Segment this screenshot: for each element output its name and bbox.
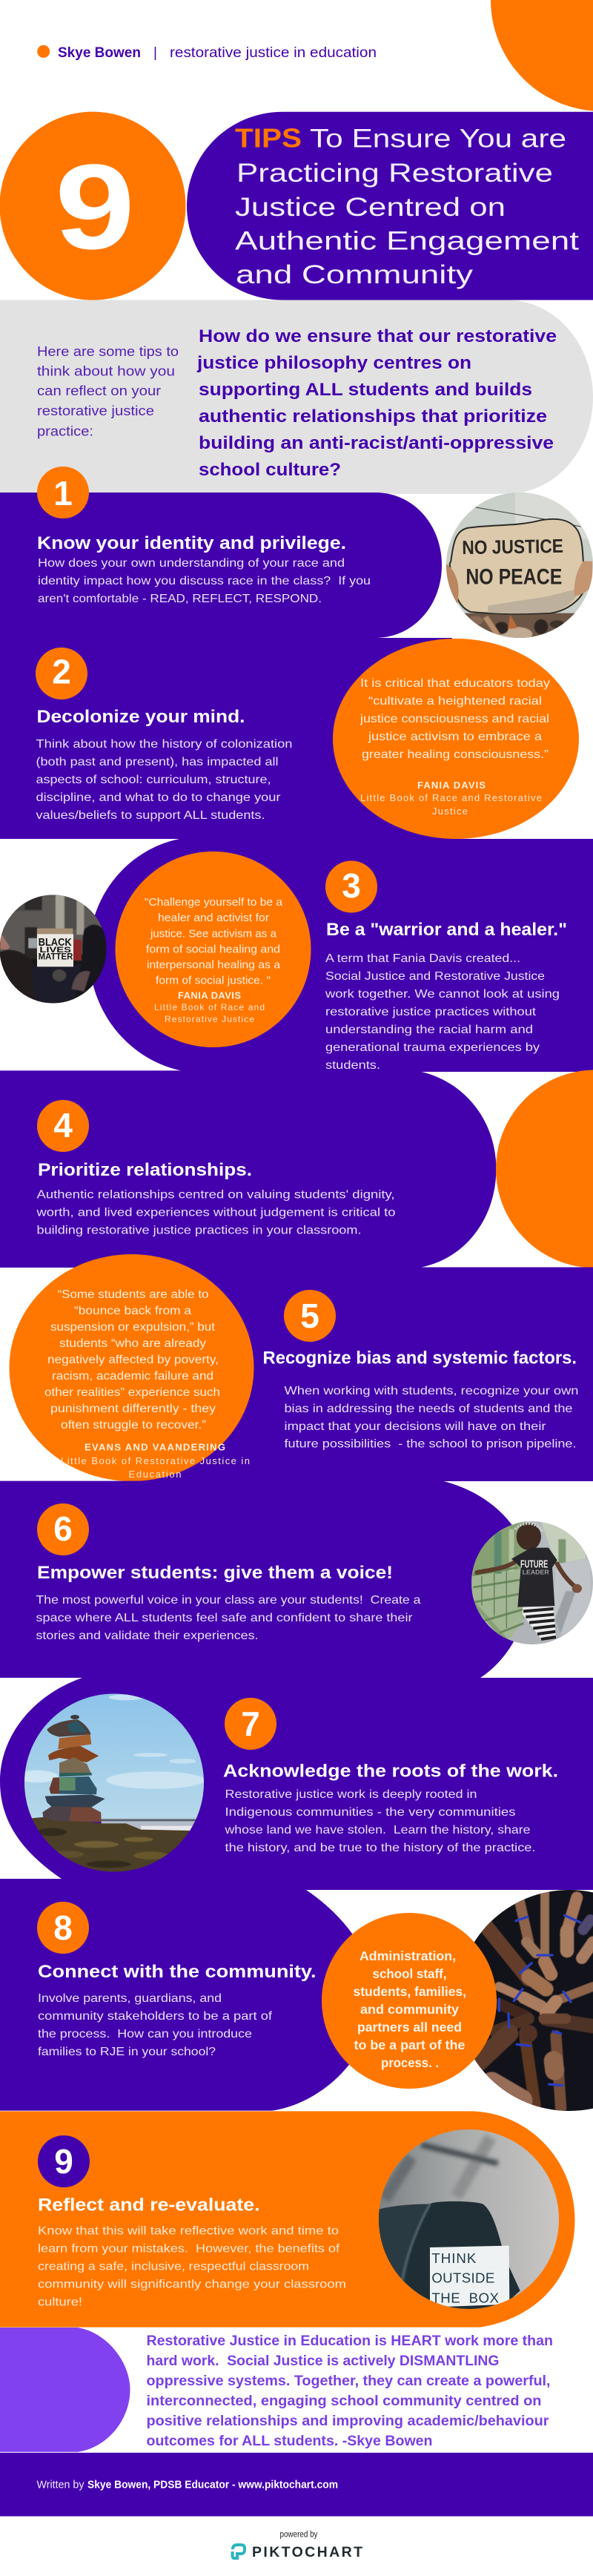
- photo: black lives matter protest: BLACK: [39, 937, 72, 949]
- footer bar: [0, 2453, 593, 2516]
- intro text: [37, 344, 179, 439]
- body 8: community stakeholders to be a part of: [38, 2010, 273, 2023]
- photo: joined hands with wristbands: [474, 1890, 593, 2111]
- body 6: stories and validate their experiences.: [36, 1630, 258, 1642]
- body 8: the process. How can you introduce: [38, 2028, 252, 2040]
- footer bar: Skye Bowen, PDSB Educator - www.piktochart.com: [87, 2479, 338, 2491]
- key question: justice philosophy centres on: [196, 353, 471, 373]
- body 2: (both past and present), has impacted all: [36, 756, 279, 768]
- body 7: [224, 1788, 535, 1854]
- body 5: [285, 1385, 578, 1451]
- body 8: [38, 1992, 273, 2058]
- panel: tip 8: [0, 1879, 593, 2114]
- body 3: Social Justice and Restorative Justice: [325, 970, 545, 983]
- title banner: Justice Centred on: [235, 193, 506, 222]
- callout bubble: community partners: to be a part of the: [354, 2038, 466, 2052]
- photo: no justice no peace sign: NO JUSTICE: [462, 535, 563, 559]
- body 9: culture!: [38, 2296, 82, 2308]
- quote bubble: Evans and Vaandering: Education: [129, 1469, 181, 1480]
- callout bubble: community partners: school staff,: [372, 1966, 446, 1981]
- closing statement: oppressive systems. Together, they can create a powerful,: [147, 2374, 550, 2389]
- number badge 9: 9: [54, 2142, 73, 2181]
- panel: tip 9: [0, 2111, 575, 2328]
- body 9: community will significantly change your classroom: [38, 2279, 346, 2290]
- quote bubble: Fania Davis: FANIA DAVIS: [417, 780, 486, 791]
- title banner: To Ensure You are: [310, 125, 566, 154]
- callout bubble: community partners: process. .: [381, 2055, 439, 2070]
- number badge 9: [38, 2135, 90, 2187]
- body 4: [36, 1188, 396, 1237]
- photo: stacked rock cairn: [24, 1694, 204, 1872]
- heading 4: Prioritize relationships.: [38, 1160, 252, 1180]
- quote bubble: Evans and Vaandering: punishment differently - they: [50, 1403, 216, 1415]
- body 5: When working with students, recognize your own: [285, 1385, 578, 1397]
- body 3: restorative justice practices without: [325, 1006, 537, 1018]
- body 3: A term that Fania Davis created...: [325, 952, 520, 965]
- quote bubble: Evans and Vaandering: students “who are already: [59, 1337, 206, 1350]
- quote bubble: Fania Davis: greater healing consciousness.”: [362, 748, 549, 761]
- photo: think outside the box lightbox: [379, 2129, 559, 2309]
- number badge 4: 4: [53, 1106, 73, 1144]
- header: author and topic: Skye Bowen: [58, 45, 141, 61]
- panel: tip 2: [0, 638, 579, 839]
- body 1: [38, 557, 371, 605]
- number badge 8: 8: [53, 1908, 73, 1947]
- title banner: Practicing Restorative: [236, 159, 553, 188]
- decorative orange circle right: [496, 1070, 593, 1268]
- decorative orange circle top right: [491, 0, 593, 111]
- quote bubble: challenge yourself: "Challenge yourself to be a: [145, 897, 283, 909]
- number badge 7: [225, 1698, 276, 1750]
- body 8: families to RJE in your school?: [38, 2046, 216, 2058]
- quote bubble: challenge yourself: [116, 851, 311, 1047]
- number badge 2: [36, 648, 87, 699]
- panel: tip 1: [0, 467, 593, 643]
- number badge 5: 5: [300, 1297, 319, 1335]
- quote bubble: Evans and Vaandering: other realities” experience such: [44, 1386, 220, 1399]
- quote bubble: Evans and Vaandering: suspension or expulsion,” but: [50, 1321, 216, 1334]
- body 3: understanding the racial harm and: [325, 1024, 533, 1036]
- quote bubble: Fania Davis: justice consciousness and racial: [360, 713, 549, 725]
- quote bubble: challenge yourself: healer and activist for: [158, 912, 269, 924]
- heading 6: Empower students: give them a voice!: [37, 1563, 393, 1583]
- heading 9: Reflect and re-evaluate.: [38, 2195, 259, 2215]
- number badge 6: 6: [53, 1509, 73, 1548]
- title banner: [187, 112, 593, 300]
- photo: black lives matter protest: LIVES: [39, 946, 71, 955]
- quote bubble: challenge yourself: interpersonal healing as a: [147, 960, 281, 972]
- closing statement: interconnected, engaging school community centred on: [147, 2394, 541, 2409]
- body 4: worth, and lived experiences without judgement is critical to: [36, 1206, 396, 1219]
- key question: How do we ensure that our restorative: [199, 326, 557, 346]
- body 2: values/beliefs to support ALL students.: [36, 809, 265, 822]
- photo: black lives matter protest: [0, 895, 107, 1003]
- quote bubble: Fania Davis: Justice: [432, 806, 468, 817]
- body 5: bias in addressing the needs of students and the: [285, 1403, 573, 1415]
- body 4: building restorative justice practices in your classroom.: [37, 1224, 362, 1237]
- number badge 8: [37, 1902, 89, 1954]
- body 6: space where ALL students feel safe and confident to share their: [36, 1612, 413, 1624]
- photo: think outside the box lightbox: OUTSIDE: [431, 2270, 494, 2285]
- photo: think outside the box lightbox: THE BOX: [431, 2290, 500, 2305]
- quote bubble: challenge yourself: Little Book of Race and: [154, 1002, 265, 1012]
- callout bubble: community partners: [322, 1913, 497, 2089]
- body 5: future possibilities - the school to prison pipeline.: [285, 1437, 577, 1451]
- panel: tip 6: [0, 1481, 593, 1678]
- body 9: creating a safe, inclusive, respectful classroom: [38, 2261, 309, 2273]
- body 5: impact that your decisions will have on their: [285, 1420, 546, 1433]
- closing statement: outcomes for ALL students. -Skye Bowen: [147, 2434, 433, 2449]
- number badge 7: 7: [241, 1704, 260, 1743]
- intro text: Here are some tips to: [37, 344, 179, 359]
- body 2: Think about how the history of colonization: [36, 738, 292, 751]
- heading 5: Recognize bias and systemic factors.: [262, 1348, 577, 1368]
- quote bubble: challenge yourself: Restorative Justice: [165, 1014, 254, 1024]
- photo: child in future leader shirt: [467, 1517, 593, 1648]
- photo: black lives matter protest: MATTER: [39, 952, 73, 962]
- body 4: Authentic relationships centred on valuing students' dignity,: [37, 1188, 394, 1202]
- quote bubble: challenge yourself: form of social healing and: [146, 943, 280, 955]
- number badge 1: 1: [53, 474, 73, 513]
- quote bubble: Fania Davis: [333, 639, 579, 839]
- callout bubble: community partners: Administration,: [360, 1949, 456, 1963]
- body 3: work together. We cannot look at using: [325, 988, 560, 1001]
- big number nine badge: 9: [55, 139, 135, 274]
- panel: tip 7: [0, 1678, 593, 1890]
- body 2: [36, 738, 292, 822]
- body 7: Indigenous communities - the very communities: [225, 1806, 516, 1819]
- body 3: generational trauma experiences by: [325, 1041, 540, 1054]
- heading 1: Know your identity and privilege.: [37, 533, 346, 553]
- closing statement: positive relationships and improving academic/behaviour: [147, 2414, 549, 2429]
- quote bubble: Evans and Vaandering: negatively affected by poverty,: [47, 1354, 219, 1366]
- body 1: aren't comfortable - READ, REFLECT, RESPOND.: [38, 593, 322, 605]
- key question: supporting ALL students and builds: [199, 380, 532, 400]
- footer bar: Written by: [37, 2479, 85, 2491]
- closing statement: hard work. Social Justice is actively DISMANTLING: [147, 2353, 500, 2369]
- callout bubble: community partners: and community: [360, 2002, 459, 2017]
- body 1: identity impact how you discuss race in the class? If you: [38, 575, 371, 587]
- photo: no justice no peace sign: NO PEACE: [466, 564, 562, 589]
- intro text: can reflect on your: [37, 383, 161, 398]
- quote bubble: Evans and Vaandering: EVANS AND VAANDERING: [85, 1442, 225, 1452]
- quote bubble: Evans and Vaandering: [9, 1254, 254, 1481]
- quote bubble: Evans and Vaandering: racism, academic failure and: [52, 1370, 213, 1383]
- body 7: whose land we have stolen. Learn the history, share: [224, 1824, 531, 1837]
- body 9: Know that this will take reflective work and time to: [38, 2225, 339, 2237]
- powered by piktochart logo: PIKTOCHART: [252, 2544, 362, 2560]
- number badge 3: 3: [342, 866, 361, 905]
- panel: tip 5: [9, 1254, 593, 1481]
- key question: [196, 326, 557, 480]
- quote bubble: challenge yourself: FANIA DAVIS: [178, 989, 241, 1001]
- body 1: How does your own understanding of your race and: [38, 557, 345, 570]
- big number nine badge: [0, 112, 185, 300]
- body 8: Involve parents, guardians, and: [38, 1992, 222, 2005]
- title banner: and Community: [236, 260, 474, 289]
- header: author and topic: |: [153, 45, 157, 61]
- intro text: think about how you: [37, 363, 175, 378]
- quote bubble: challenge yourself: form of social justice. ": [156, 975, 271, 986]
- number badge 3: [325, 860, 377, 912]
- quote bubble: challenge yourself: justice. See activism as a: [150, 929, 277, 941]
- photo: think outside the box lightbox: THINK: [431, 2250, 477, 2266]
- quote bubble: Evans and Vaandering: often struggle to recover.”: [61, 1419, 206, 1432]
- quote bubble: Evans and Vaandering: Little Book of Restorative Justice in: [61, 1455, 250, 1466]
- photo: child in future leader shirt: FUTURE: [520, 1558, 548, 1570]
- callout bubble: community partners: partners all need: [357, 2020, 462, 2035]
- closing statement: [147, 2333, 553, 2449]
- number badge 1: [37, 467, 89, 518]
- header: author and topic: [37, 45, 377, 61]
- body 2: aspects of school: curriculum, structure,: [36, 774, 271, 786]
- intro text: practice:: [37, 424, 93, 439]
- quote bubble: Evans and Vaandering: “bounce back from a: [74, 1305, 191, 1317]
- body 6: The most powerful voice in your class are your students! Create a: [36, 1594, 421, 1607]
- photo: no justice no peace sign: [441, 490, 593, 643]
- key question: school culture?: [199, 460, 341, 480]
- heading 7: Acknowledge the roots of the work.: [223, 1761, 558, 1782]
- body 3: students.: [325, 1059, 380, 1072]
- panel: tip 3: [0, 839, 593, 1072]
- quote bubble: Fania Davis: It is critical that educators today: [360, 677, 550, 690]
- number badge 6: [37, 1503, 89, 1555]
- heading 2: Decolonize your mind.: [37, 707, 245, 727]
- photo: child in future leader shirt: LEADER: [523, 1568, 549, 1575]
- quote bubble: Fania Davis: Little Book of Race and Restorative: [360, 792, 542, 803]
- number badge 2: 2: [52, 653, 71, 691]
- header: author and topic: restorative justice in education: [170, 45, 377, 61]
- key question: building an anti-racist/anti-oppressive: [199, 433, 554, 453]
- body 6: [36, 1594, 421, 1642]
- decorative light purple half circle: [0, 2328, 130, 2452]
- heading 8: Connect with the community.: [38, 1962, 316, 1982]
- number badge 4: [37, 1100, 89, 1152]
- quote bubble: Evans and Vaandering: “Some students are able to: [58, 1288, 209, 1301]
- callout bubble: community partners: students, families,: [353, 1984, 466, 1999]
- number badge 5: [284, 1290, 336, 1342]
- body 3: [325, 952, 560, 1072]
- powered by piktochart logo: [233, 2531, 362, 2560]
- body 9: learn from your mistakes. However, the benefits of: [38, 2243, 340, 2255]
- title banner: Authentic Engagement: [235, 227, 579, 256]
- closing statement: Restorative Justice in Education is HEART work more than: [147, 2333, 553, 2349]
- panel: introduction: [0, 300, 593, 494]
- panel: tip 4: [0, 1070, 593, 1268]
- intro text: restorative justice: [37, 403, 154, 418]
- body 9: [38, 2225, 346, 2308]
- body 7: the history, and be true to the history of the practice.: [225, 1842, 535, 1854]
- title banner: TIPS: [235, 123, 302, 154]
- key question: authentic relationships that prioritize: [199, 406, 547, 426]
- heading 3: Be a "warrior and a healer.": [326, 920, 567, 940]
- powered by piktochart logo: powered by: [280, 2531, 318, 2540]
- quote bubble: Fania Davis: “cultivate a heightened racial: [368, 695, 542, 708]
- quote bubble: Fania Davis: justice activism to embrace a: [368, 731, 542, 743]
- body 2: discipline, and what to do to change your: [36, 791, 281, 804]
- body 7: Restorative justice work is deeply rooted in: [225, 1788, 477, 1801]
